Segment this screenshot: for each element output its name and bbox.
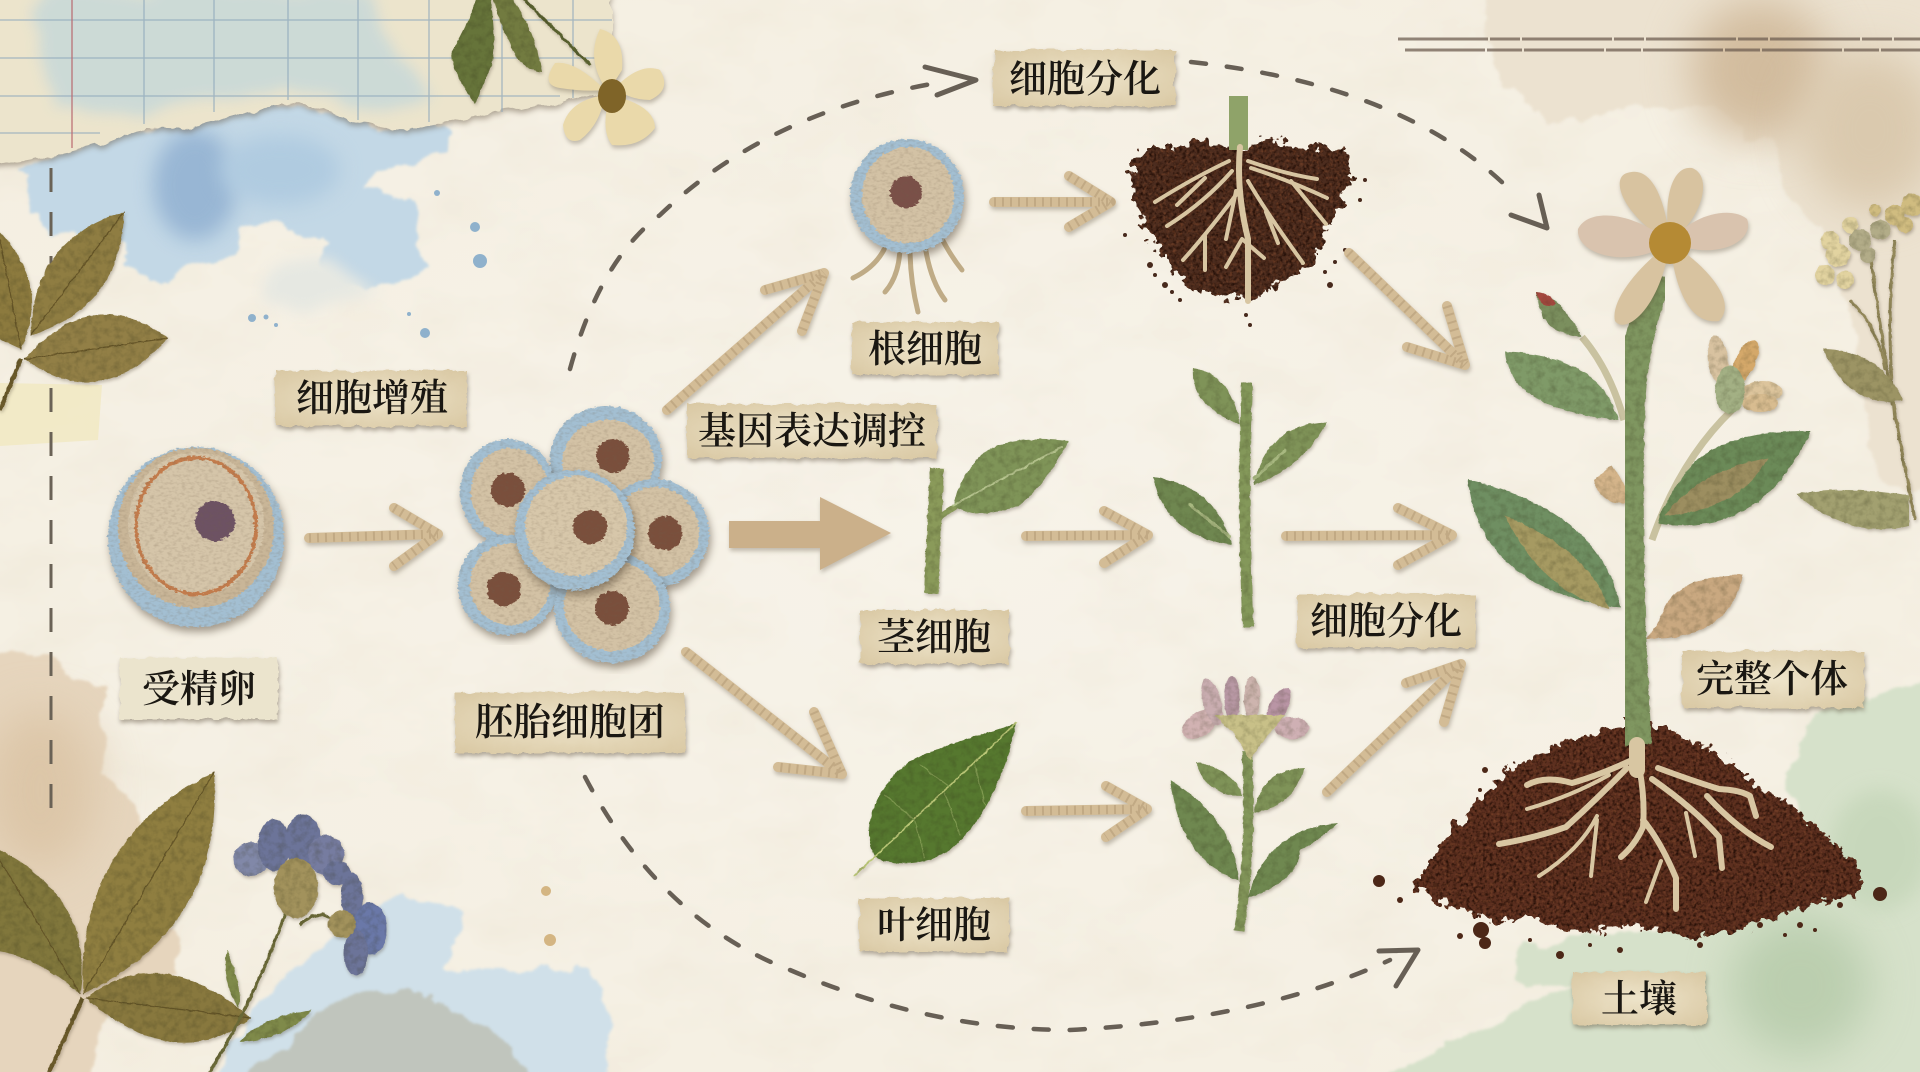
label: 叶细胞: 叶细胞 [877, 905, 991, 947]
label: 细胞分化 lower: 细胞分化 [1310, 601, 1462, 643]
icon: young shoot [1153, 368, 1327, 627]
leaf right [1658, 431, 1811, 525]
label: 细胞分化 lower [1297, 594, 1475, 648]
pressed leaf left [0, 212, 168, 410]
label: 细胞增殖 [275, 371, 467, 426]
rope arrow: cluster to root cell [667, 273, 824, 410]
icon: flowering sprig [1170, 676, 1338, 931]
label: 茎细胞 [860, 610, 1009, 664]
label: 胚胎细胞团: 胚胎细胞团 [475, 702, 665, 744]
stalks [1582, 337, 1732, 540]
flower [1578, 168, 1748, 325]
blue and grey wash bottom [208, 895, 612, 1072]
leaf lower left [1468, 480, 1621, 609]
blue watercolor wash top left [18, 101, 453, 315]
rope arrow: cluster to leaf cell [686, 652, 842, 774]
label: 完整个体 [1682, 651, 1864, 708]
label: 细胞分化 top: 细胞分化 [1009, 59, 1161, 101]
label: 细胞增殖: 细胞增殖 [296, 378, 448, 420]
tan stain bottom left [0, 648, 178, 1072]
icon: root in soil [1123, 96, 1367, 327]
label: 土壤: 土壤 [1601, 979, 1677, 1021]
label: 叶细胞 [859, 898, 1009, 952]
side flower [1705, 334, 1782, 414]
label: 受精卵: 受精卵 [142, 669, 256, 711]
brown stain top right [1480, 0, 1920, 496]
roots [1499, 745, 1771, 909]
label: 细胞分化 top [994, 50, 1175, 106]
label: 胚胎细胞团 [455, 692, 685, 753]
label: 完整个体: 完整个体 [1696, 659, 1848, 701]
tan leaf [1646, 575, 1743, 639]
dried plant right edge [1796, 194, 1920, 529]
icon: root cell [850, 139, 964, 312]
small dried petal [1594, 465, 1627, 503]
rope arrow: leaf to sprig [1026, 786, 1147, 837]
icon: stem cell sprig [931, 439, 1068, 594]
cell [458, 535, 558, 635]
cell [550, 406, 662, 512]
label: 土壤 [1573, 972, 1706, 1025]
soil pile [1373, 722, 1887, 959]
vertical dashed line left [50, 168, 52, 810]
graph paper scrap [0, 0, 612, 167]
icon: embryo cell cluster [458, 406, 709, 663]
dashed arc bottom [585, 777, 1418, 1030]
rope arrow: root to plant [1349, 253, 1465, 365]
label: 根细胞: 根细胞 [868, 329, 982, 371]
yellow tape [0, 383, 102, 446]
cell [554, 553, 670, 663]
cell [601, 479, 709, 587]
cell [515, 470, 635, 590]
pressed sprig top [451, 0, 590, 104]
icon: fertilized egg [108, 447, 284, 627]
pressed leaves bottom left [0, 772, 251, 1072]
leaf upper left [1505, 352, 1618, 420]
dashed arc top right [1191, 62, 1547, 228]
icon: full plant [1468, 168, 1811, 909]
double rule top right [1398, 39, 1920, 50]
rope arrow: stem to shoot [1026, 511, 1148, 563]
rope arrow: shoot to plant [1286, 508, 1452, 565]
icon: green leaf [854, 723, 1016, 876]
dashed arc top left [570, 67, 976, 369]
rope arrow: root cell to root [994, 176, 1111, 227]
label: 受精卵 [120, 658, 278, 719]
paint splatter [248, 190, 556, 946]
label: 基因表达调控: 基因表达调控 [698, 411, 926, 453]
pressed yellow flower top [549, 29, 664, 145]
green wash bottom right [1382, 680, 1920, 1072]
cell [460, 439, 556, 545]
main stem [1630, 275, 1660, 745]
rope arrow: sprig to plant [1327, 664, 1461, 792]
rope arrow: egg to cluster [309, 508, 438, 566]
label: 根细胞 [852, 322, 998, 375]
label: 茎细胞: 茎细胞 [877, 617, 991, 659]
bud [1536, 292, 1582, 337]
pressed blue flowers [208, 814, 387, 1072]
icon: cardboard arrow [729, 497, 891, 570]
